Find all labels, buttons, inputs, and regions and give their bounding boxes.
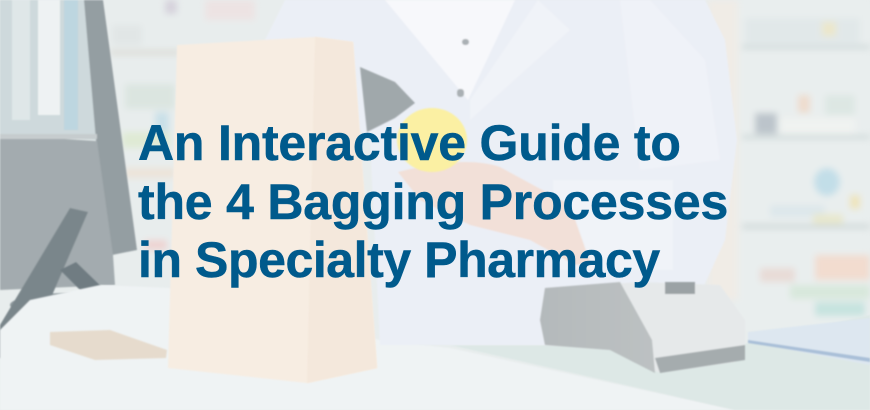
paper bag <box>168 37 377 383</box>
shelves: right background <box>708 0 870 330</box>
blue tray at right <box>748 318 870 365</box>
title: An Interactive Guide to <box>138 115 681 171</box>
title <box>138 115 728 288</box>
shelves: left background <box>100 0 290 300</box>
counter <box>0 285 735 410</box>
yellow pill bottle <box>397 108 467 172</box>
title: the 4 Bagging Processes <box>138 174 728 230</box>
lab coat pharmacist <box>265 0 737 345</box>
barcode scanner <box>360 67 415 132</box>
glass counter right <box>450 315 870 410</box>
title: in Specialty Pharmacy <box>138 232 660 288</box>
receipts on counter <box>50 330 167 360</box>
monitor and stand <box>0 0 167 360</box>
card terminal <box>540 282 745 373</box>
